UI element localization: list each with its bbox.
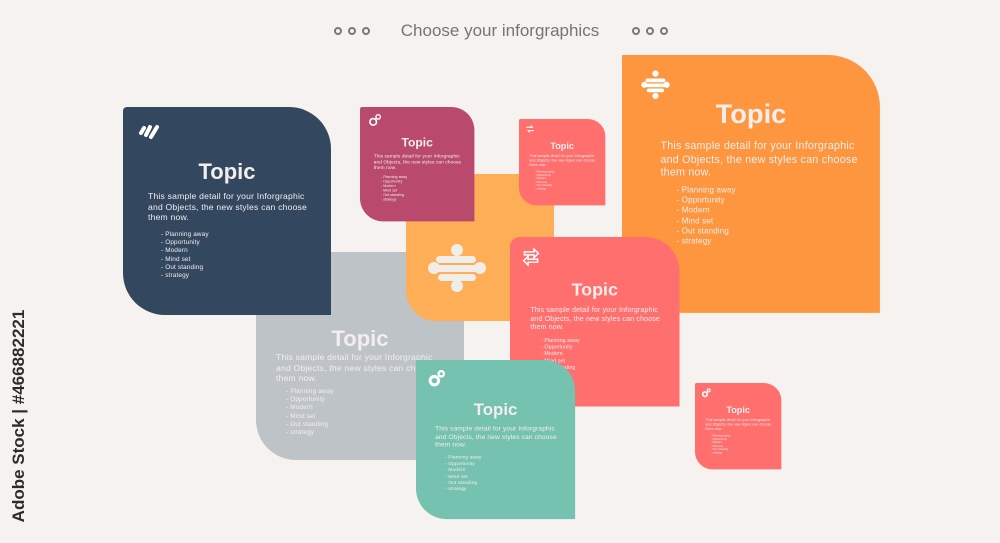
card: magenta: - Planning away [381, 175, 407, 179]
icon: gears [428, 370, 446, 386]
card: red middle: - Opportunity [541, 345, 573, 350]
card: small red bottom right: - Out standing [711, 448, 728, 451]
card: small red top: - Modern [535, 177, 546, 180]
card: big orange: - Planning away [677, 186, 736, 195]
card: navy: - Planning away [161, 231, 209, 238]
card: magenta: - Opportunity [381, 180, 402, 184]
card: teal: Topic [474, 400, 517, 419]
card: small red bottom right [695, 383, 781, 469]
card: magenta [360, 107, 474, 221]
card: big orange [622, 55, 880, 313]
dots right [632, 27, 668, 35]
card: big orange: - strategy [677, 237, 711, 246]
card: navy: - Mind set [161, 256, 191, 263]
card: big orange: - Modern [677, 207, 710, 215]
card: big orange: This sample detail for your Inforgraphic and Objects, the new styles can choose them now. [660, 139, 858, 178]
card: small red bottom right: Topic [726, 405, 750, 415]
card: small red bottom right: This sample detail for your Inforgraphic and Objects, the new styles can choose them now. [705, 418, 771, 431]
card: red middle [510, 237, 680, 407]
card: small red top: - Out standing [535, 184, 552, 187]
card: navy: - Out standing [161, 264, 203, 271]
icon: network small [641, 70, 670, 99]
card: teal: - Opportunity [445, 461, 475, 466]
card: navy: Topic [198, 159, 256, 184]
card: magenta: - Mind set [381, 189, 397, 193]
icon: gears [369, 114, 381, 126]
card: small red bottom right: - Planning away [711, 434, 731, 437]
icon: gears [702, 388, 711, 398]
card: small red bottom right: - Modern [711, 441, 722, 444]
card: gray: - strategy [286, 429, 314, 436]
icon: network [428, 244, 486, 292]
card: red middle: - Out standing [541, 365, 575, 371]
card: gray: Topic [331, 326, 389, 351]
dots left [334, 27, 370, 35]
card: red middle: This sample detail for your Inforgraphic and Objects, the new styles can choose them now. [530, 305, 660, 331]
card: gray: This sample detail for your Inforgraphic and Objects, the new styles can choose them now. [276, 352, 435, 383]
card: red middle: - Modern [541, 351, 563, 357]
icon: stripes [138, 124, 160, 140]
card: red middle: - strategy [541, 371, 564, 377]
icon: arrows [522, 247, 540, 266]
card: teal: - Modern [445, 467, 466, 473]
card: big orange: Topic [716, 98, 786, 129]
card: big orange: - Mind set [677, 217, 713, 226]
card: gray: - Opportunity [286, 396, 325, 403]
card: small red top: - Planning away [535, 170, 555, 173]
card: small red top: Topic [550, 141, 574, 151]
card: small red top: - strategy [535, 187, 546, 190]
card: red middle: Topic [572, 279, 618, 300]
card: teal: - Planning away [445, 455, 482, 460]
card: small red top: - Mind set [535, 181, 547, 184]
card: small red top [519, 119, 605, 205]
card: magenta: This sample detail for your Inforgraphic and Objects, the new styles can choose them now. [374, 153, 461, 170]
card: magenta: - Modern [381, 184, 396, 188]
card: gray [256, 252, 464, 460]
card: red middle: - Mind set [541, 358, 565, 364]
card: big orange: - Out standing [677, 227, 729, 236]
card: gray: - Modern [286, 404, 313, 411]
card: small red bottom right: - Mind set [711, 445, 723, 448]
icon: arrows [518, 120, 534, 133]
card: teal: This sample detail for your Inforgraphic and Objects, the new styles can choose them now. [435, 424, 557, 448]
card: teal [416, 360, 575, 519]
card: small red bottom right: - Opportunity [711, 438, 727, 441]
card: magenta: - Out standing [381, 193, 404, 197]
card: navy: - Opportunity [161, 239, 200, 246]
card: gray: - Out standing [286, 421, 328, 428]
card: gray: - Planning away [286, 388, 334, 395]
card: magenta: - strategy [381, 198, 396, 202]
card: gray: - Mind set [286, 413, 316, 420]
header [334, 21, 668, 40]
card: teal: - Out standing [445, 480, 477, 485]
card: small red top: - Opportunity [535, 174, 551, 177]
card: magenta: Topic [402, 136, 433, 149]
side credit text: Adobe Stock | #466882221 [9, 310, 28, 522]
card: small red bottom right: - strategy [711, 451, 722, 454]
card: red middle: - Planning away [541, 338, 580, 344]
panel: light orange with network icon [406, 174, 554, 321]
card: big orange: - Opportunity [677, 197, 725, 205]
card: navy: - strategy [161, 272, 189, 279]
title: Choose your inforgraphics [401, 21, 599, 40]
card: small red top: This sample detail for your Inforgraphic and Objects, the new styles can choose them now. [529, 154, 595, 167]
card: navy [123, 107, 331, 315]
card: teal: - strategy [445, 486, 467, 492]
card: navy: This sample detail for your Inforgraphic and Objects, the new styles can choose them now. [148, 191, 307, 222]
card: navy: - Modern [161, 247, 188, 254]
card: teal: - Mind set [445, 474, 468, 479]
